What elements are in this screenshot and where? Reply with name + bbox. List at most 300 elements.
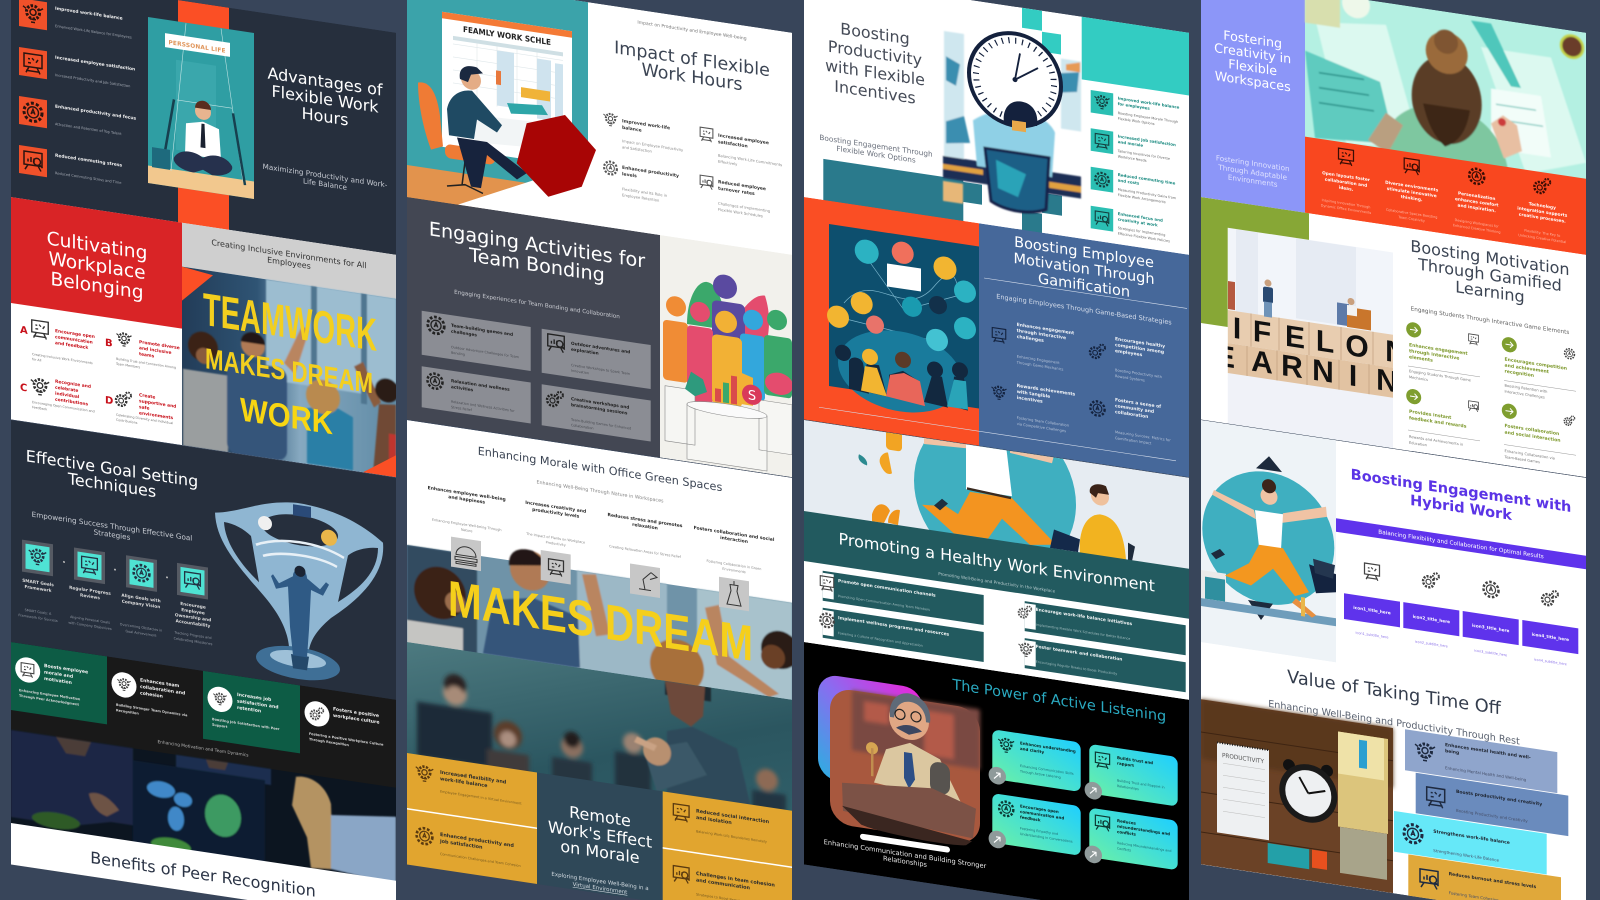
creativity factors: Diverse environments <box>1385 180 1439 194</box>
four benefits: Productivity <box>546 540 566 547</box>
photo: lifelong learning blocks: I <box>1349 359 1357 393</box>
feature cells: Increases job <box>237 692 272 703</box>
feature cells: Recognition <box>116 708 139 716</box>
gradient cards: and clarity <box>1020 746 1044 755</box>
gamification items: Encourages healthy <box>1115 336 1165 350</box>
photo: lifelong learning blocks: N <box>1376 363 1398 399</box>
gamification items: Through Game Mechanics <box>1016 360 1064 372</box>
creativity factors: Enhanced Creative Thinking <box>1453 223 1501 234</box>
gradient cards: Understanding in Conversations <box>1020 832 1073 844</box>
title: Productivity <box>828 37 922 70</box>
right yellow panel: Balancing Work-Life Boundaries Remotely <box>696 829 767 844</box>
subtitle: Enhancing Well-Being Through Nature in Workspaces <box>536 479 664 505</box>
photo: lifelong learning blocks: L <box>1316 324 1334 360</box>
title: Work Hours <box>641 60 743 95</box>
impact items: Enhanced productivity <box>622 165 679 179</box>
benefit cards: Boosts productivity and creativity <box>1456 789 1542 808</box>
incentive list: Flexible Work Options <box>1118 117 1155 126</box>
slide: Boosting Engagement with Hybrid Work <box>1201 420 1586 700</box>
gradient cards: Building Trust and Rapport in <box>1117 778 1165 790</box>
white bar <box>860 833 950 853</box>
gamification items: with tangible <box>1017 389 1050 400</box>
left yellow panel: Employee Engagement in a Virtual Environment <box>440 789 522 806</box>
title: Team Bonding <box>468 243 605 287</box>
lettered items: for All <box>32 357 41 363</box>
creativity factors <box>1321 145 1568 245</box>
creativity factors: Personalization <box>1458 191 1495 202</box>
four benefits: Enhancing Employee Well-being Through <box>432 518 502 532</box>
photo: teamwork: MAKES DREAM <box>205 343 373 400</box>
gamification items: through interactive <box>1017 328 1066 341</box>
activity cards: Relaxation and wellness <box>451 378 510 393</box>
four benefits: Increases creativity and <box>525 500 586 515</box>
subtitle: Maximizing Productivity and Work- <box>263 162 388 189</box>
benefit list <box>19 0 136 191</box>
photo: lifelong learning blocks: F <box>1253 315 1271 350</box>
incentive list: and morale <box>1118 139 1143 148</box>
title: Boosting <box>840 19 910 48</box>
photo mask edges <box>1201 197 1411 452</box>
title: Creativity in <box>1214 41 1291 68</box>
feature cells: motivation <box>44 676 72 686</box>
learning items: elements <box>1409 354 1433 364</box>
creativity factors: Flexibility: The Key to <box>1524 229 1560 238</box>
benefit list: Increased Productivity and Job Satisfaction <box>55 73 130 88</box>
subtitle: Through Adaptable <box>1217 162 1288 182</box>
learning items: Engaging Students Through Game <box>1409 369 1472 383</box>
feature cells: Fostering a Positive Workplace Culture <box>309 732 384 747</box>
four benefits: Reduces stress and promotes <box>607 512 683 529</box>
creativity factors: Collaborative Spaces Boosting <box>1386 208 1437 219</box>
photo: lifelong learning blocks: A <box>1251 345 1273 381</box>
gamification items: challenges <box>1017 334 1044 344</box>
gamification items: Gamification Impact <box>1115 436 1152 446</box>
activity cards: Creative Workshops to Spark Team <box>571 363 631 376</box>
placeholder tiles <box>1344 560 1578 668</box>
subtitle: Engaging Experiences for Team Bonding and Collaboration <box>454 290 620 320</box>
title: Workplace <box>48 249 146 284</box>
slide: Remote Work's Effect on Morale <box>407 642 793 900</box>
four benefits: Fosters collaboration and social <box>694 525 775 543</box>
gamification items: community and <box>1115 403 1154 415</box>
four benefits: Fostering Collaboration in Green <box>707 559 761 571</box>
caption: Relationships <box>883 854 927 869</box>
gamification items: Reward Systems <box>1115 374 1145 383</box>
learning items: Team-Based Games <box>1504 455 1540 464</box>
activity cards: Innovation <box>571 369 589 375</box>
gray icon tiles <box>451 537 749 611</box>
creativity factors: Designing Workspaces for <box>1455 218 1499 229</box>
left yellow panel: work-life balance <box>440 776 488 789</box>
slide: Engaging Activities for Team Bonding <box>407 197 793 477</box>
benefit list: Enhanced Work-Life Balance for Employees <box>55 24 132 40</box>
lettered items <box>20 318 180 431</box>
feature cells: collaboration and <box>140 684 185 697</box>
four benefits: Enhances employee well-being <box>428 485 506 503</box>
goal labels: Reviews <box>80 592 100 601</box>
impact items: Increased employee <box>718 133 769 146</box>
benefit list: Increased employee satisfaction <box>55 55 135 73</box>
learning items: Boosting Retention with <box>1504 384 1547 394</box>
placeholder tiles: icon4_subtitle_here <box>1534 657 1567 666</box>
title: Incentives <box>834 77 916 108</box>
slide: Advantages of Flexible Work Hours <box>11 0 396 255</box>
right yellow panel <box>663 791 793 900</box>
title: Motivation Through <box>1013 250 1155 288</box>
feature cells: Through Peer Acknowledgment <box>19 694 79 707</box>
photo: lifelong learning blocks <box>1215 226 1407 451</box>
impact items: balance <box>622 125 642 134</box>
slide: Boosting Motivation Through Gamified Learning <box>1201 197 1586 478</box>
subtitle: Promoting Well-Being and Productivity in the Workplace <box>938 571 1056 594</box>
illustration: leader in trophy <box>215 502 384 680</box>
lettered items: D <box>105 395 113 407</box>
gradient cards: Enhances understanding <box>1020 740 1076 754</box>
subtitle: Employees <box>267 255 311 271</box>
title: Hours <box>302 104 348 130</box>
wellness bars: Foster teamwork and collaboration <box>1036 644 1122 663</box>
title: Advantages of <box>267 64 383 100</box>
illustration: person at work calendar: FEAMLY WORK SCHLE <box>463 25 551 47</box>
lettered items: Encouraging Open Communication and <box>32 400 95 414</box>
title: Fostering <box>1223 28 1282 52</box>
activity cards: brainstorming sessions <box>571 402 628 417</box>
photo: lifelong learning blocks: E <box>1285 320 1305 356</box>
lettered items: Feedback <box>32 405 47 411</box>
activity cards: challenges <box>451 329 477 339</box>
lettered items: Celebrating Diversity and Individual <box>116 413 173 425</box>
creativity factors: Team Creativity <box>1397 215 1425 223</box>
benefit list: Improved work-life balance <box>55 6 123 22</box>
lettered items: and feedback <box>55 340 89 351</box>
gradient cards: rapport <box>1117 760 1134 768</box>
goal labels: Framework <box>25 584 52 594</box>
goal labels: Goal Achievement <box>125 629 157 638</box>
feature cells: Building Stronger Team Dynamics via <box>116 703 188 718</box>
title: Impact of Flexible <box>614 38 770 81</box>
gamification items: Rewards achievements <box>1017 383 1076 398</box>
four benefits: The Impact of Plants on Workplace <box>525 532 585 545</box>
lettered items: individual <box>55 391 80 400</box>
wellness bars: Implement wellness programs and resources <box>838 615 950 638</box>
impact items: Reduced employee <box>718 179 766 192</box>
title: Boosting Motivation <box>1410 236 1570 279</box>
gradient cards: Reducing Misunderstandings and <box>1117 841 1171 853</box>
activity cards: Creative workshops and <box>571 396 629 411</box>
right yellow panel: Challenges in team cohesion <box>696 871 775 889</box>
subtitle: Life Balance <box>303 176 348 192</box>
wellness bars: Encouraging Regular Breaks to Boost Productivity <box>1036 660 1117 676</box>
impact items: Employee Retention <box>622 193 660 203</box>
learning items: recognition <box>1504 369 1534 379</box>
incentive list: Improved work-life balance <box>1118 96 1180 110</box>
center panel <box>537 772 663 900</box>
title: Learning <box>1455 277 1525 307</box>
activity cards: Outdoor Adventure Challenges for Team <box>451 345 520 359</box>
green title band <box>804 511 1189 619</box>
impact items: levels <box>622 171 637 180</box>
lettered items: Recognize and <box>55 379 91 390</box>
four benefits: productivity levels <box>532 507 580 520</box>
gamification items: Boosting Productivity with <box>1115 368 1162 379</box>
impact items: Impact on Employee Productivity <box>622 139 684 153</box>
caption: Enhancing Communication and Building Stronger <box>824 838 986 870</box>
gradient cards: communication and <box>1020 809 1064 821</box>
illustration: colourful team <box>663 265 793 475</box>
creativity factors: creative processes. <box>1519 212 1566 225</box>
four benefits: and happiness <box>448 494 485 506</box>
goal labels: Celebrating Milestones <box>174 636 213 646</box>
title: Through Gamified <box>1417 255 1562 295</box>
learning items: feedback and rewards <box>1409 415 1467 430</box>
photo: desk with alarm clock: PRODUCTIVITY <box>1222 752 1264 765</box>
incentive list: Effective Flexible Work Policies <box>1118 232 1170 243</box>
lettered items: A <box>20 325 28 337</box>
gamification items: Measuring Success: Metrics for <box>1115 430 1171 443</box>
incentive list: Increased job satisfaction <box>1118 134 1176 147</box>
feature cells <box>11 642 384 754</box>
goal labels: SMART Goals: A <box>25 608 52 616</box>
lettered items: Create <box>139 392 155 401</box>
impact items: Improved work-life <box>622 118 670 131</box>
title: Promoting a Healthy Work Environment <box>839 529 1155 596</box>
title: Work's Effect <box>548 817 652 852</box>
checker decoration <box>963 0 1190 256</box>
photo: lifelong learning blocks: I <box>1233 312 1241 346</box>
left yellow panel: job satisfaction <box>439 838 483 851</box>
benefit cards: Reduces burnout and stress levels <box>1449 871 1536 890</box>
gradient cards: Through Active Listening <box>1019 769 1061 780</box>
activity cards: Collaboration <box>571 423 594 430</box>
goal labels: Overcoming Obstacles in <box>120 622 162 633</box>
four benefits <box>428 485 775 579</box>
subtitle: Engaging Employees Through Game-Based Strategies <box>996 292 1172 327</box>
incentive list: Measuring Productivity Gains from <box>1118 188 1177 200</box>
lettered items: safe <box>139 404 149 412</box>
feature cells: retention <box>237 705 261 715</box>
title: Flexible <box>1228 57 1277 79</box>
lettered items: communication <box>55 334 93 346</box>
subtitle: Strategies <box>94 527 131 542</box>
benefit cards: being <box>1445 748 1459 756</box>
creativity factors: integration supports <box>1517 205 1568 219</box>
benefit list: Attraction and Retention of Top Talent <box>55 122 122 136</box>
purple subtitle band <box>1336 518 1586 569</box>
gamification items <box>992 318 1171 449</box>
purple subtitle band: Balancing Flexibility and Collaboration for Optimal Results <box>1378 530 1544 560</box>
feature cells: Support <box>212 723 228 729</box>
photo: teamwork: WORK <box>240 392 333 442</box>
lettered items: Promote diverse <box>139 339 180 351</box>
title: Engaging Activities for <box>429 217 645 273</box>
lettered items: environments <box>139 410 173 421</box>
lettered items: celebrate <box>55 385 78 394</box>
four benefits: Creating Relaxation Areas for Stress Relief <box>609 544 682 559</box>
incentive list: and costs <box>1118 178 1140 186</box>
title: Belonging <box>50 269 144 304</box>
four benefits: Nature <box>461 528 472 533</box>
learning items: Fosters collaboration <box>1504 423 1559 437</box>
photo: lifelong learning blocks: E <box>1215 339 1235 375</box>
left yellow panel: Increased flexibility and <box>440 770 507 786</box>
incentive list <box>1091 90 1180 245</box>
impact items: satisfaction <box>718 139 748 150</box>
placeholder tiles: icon2_title_here <box>1413 614 1450 624</box>
creativity factors: ideas. <box>1339 185 1354 193</box>
placeholder tiles: icon4_title_here <box>1532 632 1569 642</box>
gradient cards: misunderstandings and <box>1117 823 1170 836</box>
benefit cards: Strengthening Work-Life Balance <box>1433 848 1499 863</box>
photo: teamwork: TEAMWORK <box>203 283 377 361</box>
activity cards: Relaxation and Wellness Activities for <box>451 400 515 413</box>
gradient cards: Enhancing Communication Skills <box>1020 764 1074 776</box>
goal labels: Company Vision <box>122 599 160 610</box>
photo: pointing man with blurred team <box>407 642 792 825</box>
slide: Benefits of Peer Recognition <box>11 642 396 900</box>
activity cards: Team-Building Games for Enhanced <box>570 417 631 431</box>
gradient cards: Reduces <box>1117 818 1137 826</box>
subtitle: Empowering Success Through Effective Goal <box>32 510 192 543</box>
learning items <box>1406 321 1576 470</box>
title: Boosting Employee <box>1014 234 1154 271</box>
top caption: Impact on Productivity and Employee Well-being <box>637 20 747 42</box>
feature cells: morale and <box>44 669 73 680</box>
title: Benefits of Peer Recognition <box>90 848 316 900</box>
learning items: Enhances engagement <box>1409 342 1468 357</box>
slide: Cultivating Workplace Belonging <box>11 197 399 478</box>
goal labels <box>18 577 213 646</box>
wellness bars: Encourage work-life balance initiatives <box>1036 607 1132 627</box>
lettered items: contributions <box>55 397 88 408</box>
title: Enhancing Morale with Office Green Spaces <box>478 445 722 494</box>
slide: Promoting a Healthy Work Environment <box>804 383 1189 700</box>
gamification items: Enhancing Engagement <box>1017 355 1060 365</box>
activity cards: activities <box>451 384 474 393</box>
subtitle: Creating Inclusive Environments for All <box>211 238 367 270</box>
gradient cards: Encourages open <box>1020 803 1059 814</box>
subtitle: Environments <box>1228 173 1278 189</box>
photo: lifelong learning blocks: N <box>1385 335 1407 371</box>
benefit list: Reduced Commuting Stress and Time <box>55 171 121 185</box>
wellness bars: Fostering a Culture of Recognition and Appreciation <box>838 631 923 648</box>
green frame <box>1201 197 1309 339</box>
feature cells: Enhancing Employee Motivation <box>19 688 81 701</box>
title: on Morale <box>560 837 640 867</box>
lettered items: and inclusive <box>139 345 172 356</box>
gamification items: collaboration <box>1115 409 1148 420</box>
learning items: Rewards and Achievements in <box>1409 435 1463 447</box>
benefit list: Reduced commuting stress <box>55 153 122 169</box>
subtitle: Fostering Innovation <box>1216 153 1290 173</box>
photo: desk with alarm clock <box>1201 699 1393 893</box>
illustration: jumping woman and laptop user <box>858 391 1135 595</box>
title: Value of Taking Time Off <box>1287 667 1502 720</box>
impact items: Flexibility and Its Role in <box>622 187 668 198</box>
impact items: turnover rates <box>718 186 755 197</box>
goal icons <box>22 540 208 600</box>
left yellow panel <box>407 753 537 884</box>
gamification items: Fostering Team Collaboration <box>1017 416 1069 428</box>
feature cells: Enhances team <box>140 677 180 689</box>
title: Boosting Engagement with <box>1351 466 1571 516</box>
feature cells: workplace culture <box>333 713 379 726</box>
illustration: colourful team: S <box>748 388 756 404</box>
title: Remote <box>569 802 631 831</box>
incentive list: Flexible Work Arrangements <box>1118 193 1166 204</box>
learning items: and social interaction <box>1504 430 1561 444</box>
photo: lifelong learning blocks: N <box>1312 354 1334 390</box>
slide: Impact of Flexible Work Hours <box>407 0 792 256</box>
impact items: Effectively <box>718 160 738 167</box>
illustration: personal life <box>148 17 254 199</box>
gradient cards: conflicts <box>1117 829 1137 837</box>
four benefits: interaction <box>720 535 748 545</box>
lettered items: supportive and <box>139 398 176 410</box>
gamification items: incentives <box>1017 395 1043 405</box>
creativity factors: Unlocking Creative Potential <box>1518 233 1566 244</box>
wellness bars: Implementing Flexible Work Schedules for Better Balance <box>1036 623 1130 641</box>
wellness bars <box>820 570 1186 692</box>
title: The Power of Active Listening <box>951 676 1166 725</box>
lettered items: Encourage open <box>55 328 95 340</box>
activity cards: Stress Relief <box>451 405 473 412</box>
incentive list: creativity at work <box>1118 217 1158 228</box>
learning items: and achievement <box>1504 363 1550 375</box>
feature cells: Fosters a positive <box>333 706 379 719</box>
creativity factors: enhances comfort <box>1455 196 1498 209</box>
title: Flexible Work <box>271 82 379 117</box>
gradient cards: Conflicts <box>1117 846 1131 853</box>
incentive list: Strategies for Implementing <box>1118 226 1165 237</box>
illustration: clock and worker <box>943 23 1081 222</box>
illustration: person at work calendar <box>407 0 588 225</box>
slide: Value of Taking Time Off <box>1201 642 1586 900</box>
title: Techniques <box>67 469 156 501</box>
slide: Enhancing Morale with Office Green Spaces <box>407 420 799 712</box>
subtitle: Enhancing Well-Being and Productivity Through Rest <box>1268 699 1520 748</box>
lettered items: teams <box>139 351 155 360</box>
impact items: Flexible Work Schedules <box>718 208 763 218</box>
gradient cards: feedback <box>1020 814 1041 823</box>
slide: The Power of Active Listening <box>804 642 1189 900</box>
goal labels: Regular Progress <box>69 585 111 597</box>
goal labels: Align Goals with <box>121 593 161 604</box>
impact items: Challenges of Implementing <box>718 202 771 214</box>
gradient cards: Fostering Empathy and <box>1020 826 1058 836</box>
goal labels: Tracking Progress and <box>173 630 212 640</box>
lettered items: Team Members <box>115 362 141 369</box>
right yellow panel: and isolation <box>696 815 732 826</box>
activity cards <box>422 311 651 442</box>
goal labels: with Company Objectives <box>68 621 112 631</box>
activity cards: Bonding <box>451 351 465 357</box>
photo: makes dream: MAKES DREAM <box>448 569 753 672</box>
placeholder tiles: icon1_title_here <box>1353 605 1391 615</box>
left yellow panel: Communication Challenges and Team Cohesion <box>440 852 521 868</box>
creativity factors: Dynamic Office Environments <box>1321 203 1371 215</box>
title: Workspaces <box>1215 69 1291 95</box>
right yellow panel: Reduced social interaction <box>696 808 770 825</box>
benefit list: Enhanced productivity and focus <box>55 104 136 122</box>
lettered items: B <box>105 338 113 350</box>
photo: woman reviewing papers <box>1305 0 1586 183</box>
incentive list: Tailoring Incentives for Diverse <box>1117 149 1170 161</box>
gradient cards: Builds trust and <box>1117 755 1153 765</box>
activity cards: Outdoor adventures and <box>571 341 630 355</box>
gamification items: Fosters a sense of <box>1115 397 1161 410</box>
goal labels: Encourage <box>180 601 206 611</box>
placeholder tiles: icon3_title_here <box>1472 623 1510 633</box>
